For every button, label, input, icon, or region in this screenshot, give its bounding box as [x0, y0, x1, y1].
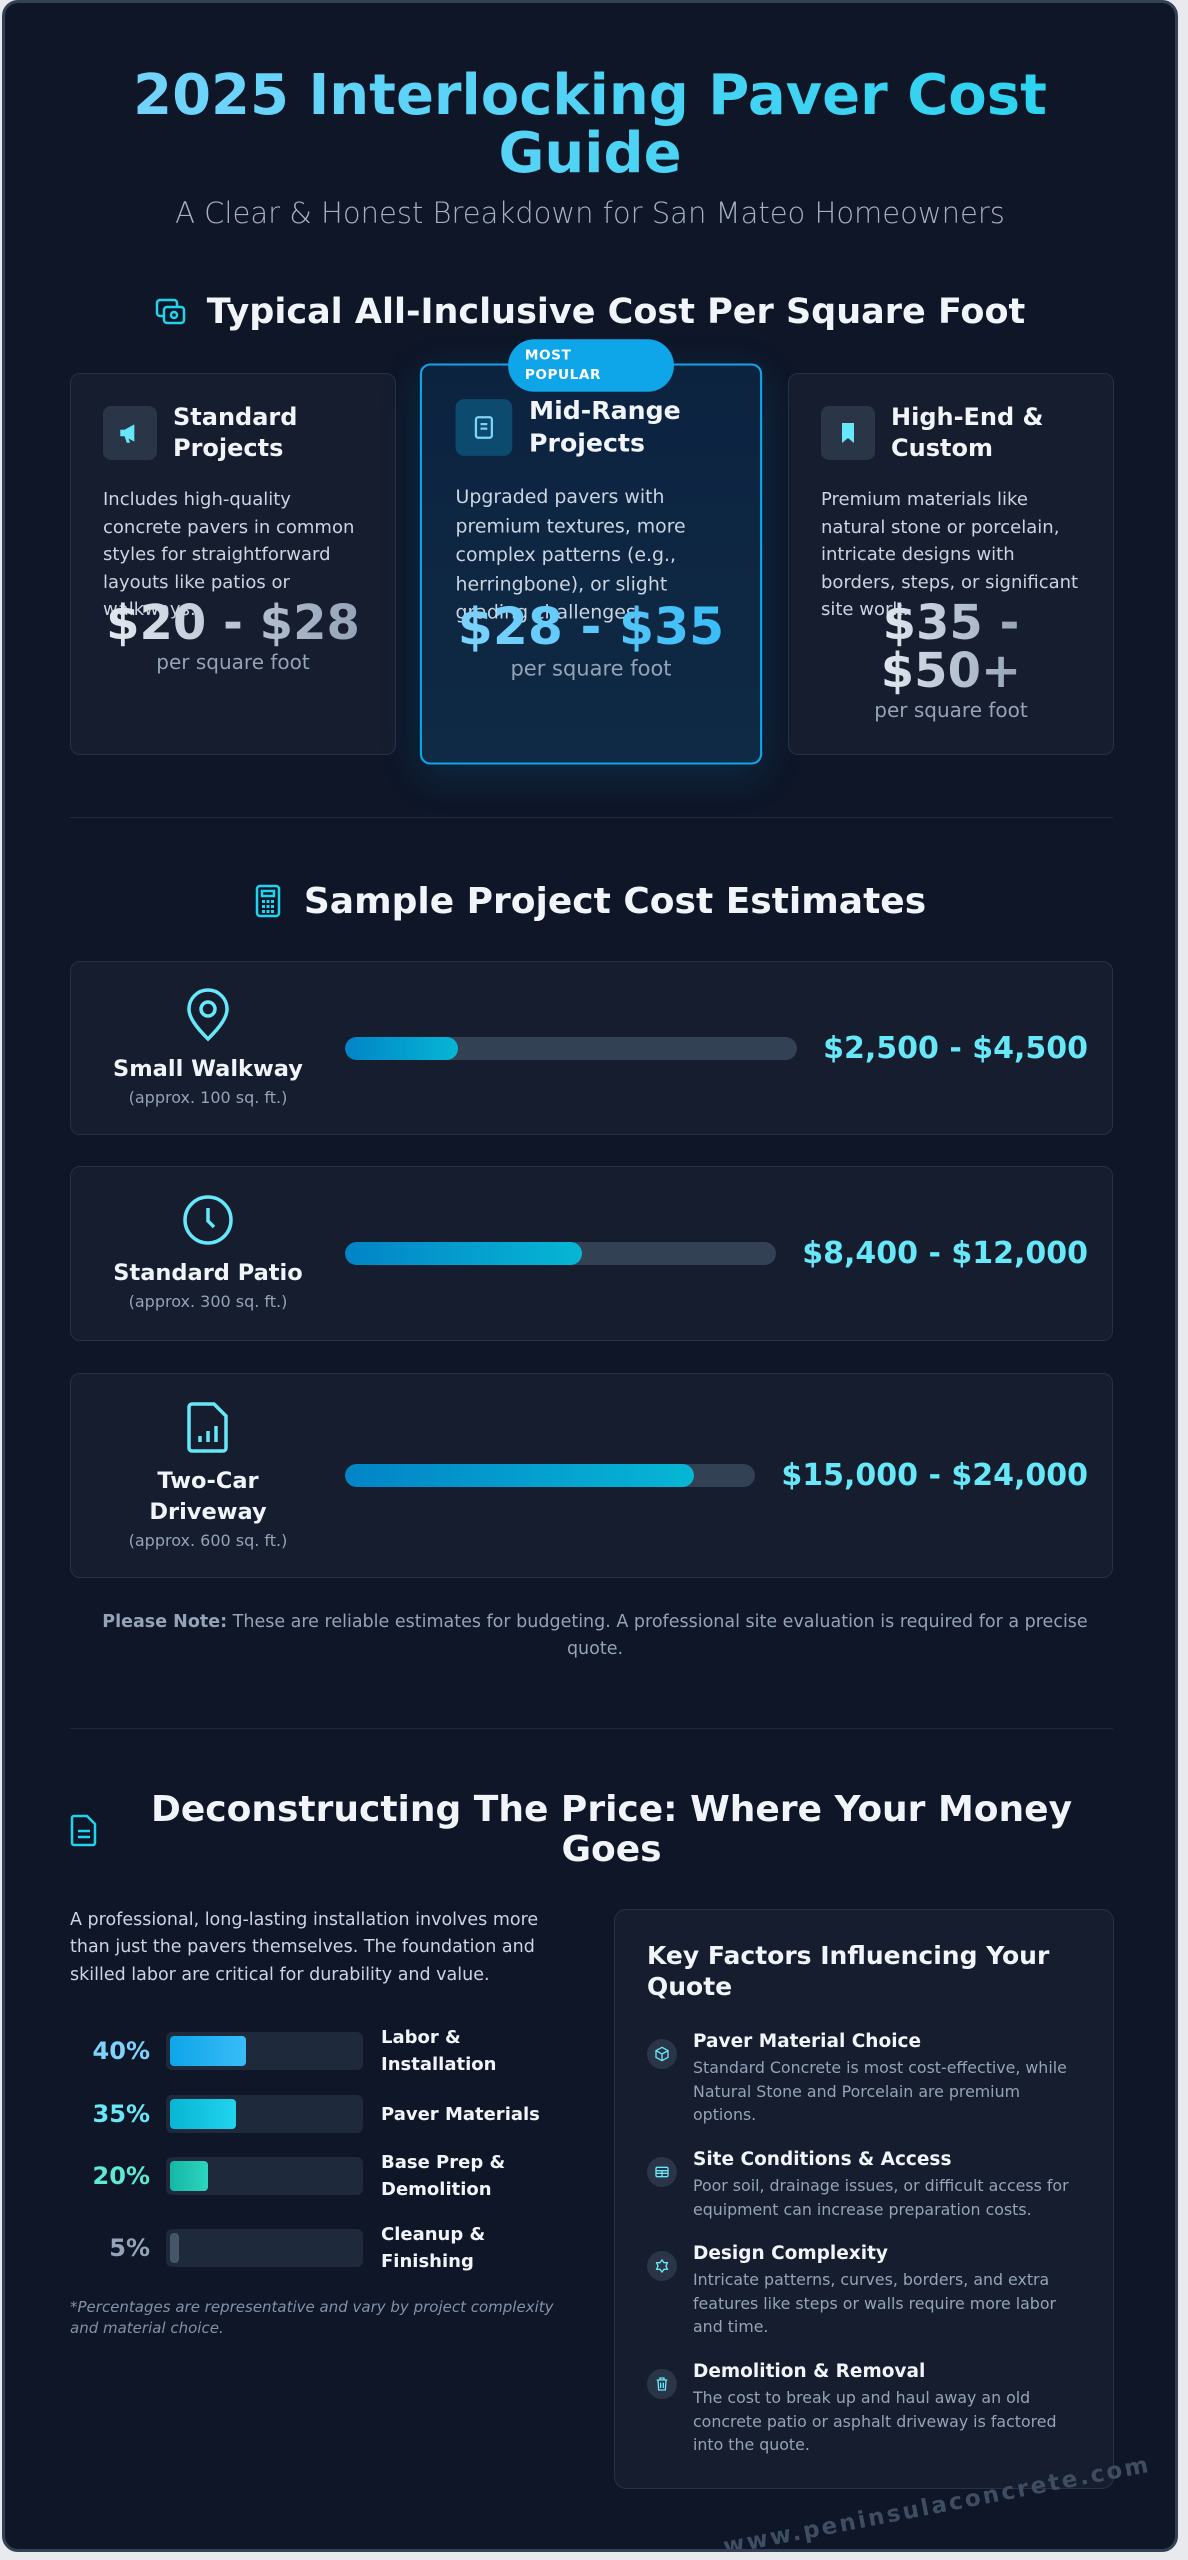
row: two-car driveway: $15,000 - $24,000 — [781, 1458, 1088, 1493]
card: high-end: Premium materials like natural stone or porcelain, intricate designs with borders, steps, or significant site work. — [821, 489, 1078, 620]
factor: demolition: Demolition & Removal — [693, 2361, 925, 2382]
price: $28 - $35 — [458, 598, 724, 656]
price: per square foot — [510, 655, 672, 681]
note: Please Note: These are reliable estimates for budgeting. A professional site evaluation is required for a precise quote. — [102, 1612, 1088, 1659]
text: 35% — [93, 2100, 150, 2128]
factor: material: Standard Concrete is most cost-effective, while Natural Stone and Porcelain are premium options. — [693, 2058, 1067, 2124]
factor: demolition — [647, 2361, 1057, 2454]
row: small walkway: (approx. 100 sq. ft.) — [129, 1088, 287, 1106]
icon: file chart — [187, 1402, 228, 1453]
price: $35 - — [883, 595, 1019, 651]
row: two-car driveway: Driveway — [149, 1498, 267, 1524]
card: standard projects: Standard Projects — [173, 403, 297, 462]
icon: bookmark — [821, 406, 875, 460]
row: two-car driveway: Two-Car — [157, 1468, 259, 1494]
card: standard projects — [70, 373, 396, 755]
footnote: *Percentages are representative and vary by project complexity and material choice. — [70, 2298, 554, 2337]
text: Base Prep & Demolition — [381, 2152, 505, 2200]
panel: key factors — [614, 1909, 1114, 2489]
price — [874, 595, 1028, 722]
factor: design: Design Complexity — [693, 2243, 888, 2264]
bar — [345, 1036, 797, 1060]
factor: site: Poor soil, drainage issues, or difficult access for equipment can increase preparation costs. — [693, 2176, 1069, 2218]
badge: most popular — [508, 339, 674, 392]
factor: material — [647, 2031, 1067, 2124]
card: standard projects: Includes high-quality concrete pavers in common styles for straightforward layouts like patios or walkways. — [103, 489, 354, 620]
factor: site — [647, 2149, 1069, 2218]
icon: document — [456, 399, 512, 456]
row: small walkway: $2,500 - $4,500 — [823, 1030, 1088, 1066]
subtitle: A Clear & Honest Breakdown for San Mateo Homeowners — [175, 196, 1005, 230]
card: high-end — [788, 373, 1114, 755]
row: standard patio: $8,400 - $12,000 — [802, 1236, 1088, 1271]
title: 2025 Interlocking Paver Cost — [133, 63, 1047, 128]
row: small walkway — [70, 961, 1113, 1135]
factor: design: Intricate patterns, curves, borders, and extra features like steps or walls require more labor and time. — [693, 2270, 1056, 2336]
row: standard patio: Standard Patio — [113, 1260, 303, 1286]
text: 5% — [109, 2234, 150, 2262]
price: per square foot — [874, 698, 1028, 722]
panel: key factors: Key Factors Influencing Your Quote — [647, 1941, 1049, 2001]
card: mid-range projects — [420, 363, 762, 765]
card: mid-range projects: Upgraded pavers with premium textures, more complex patterns (e.g., herringbone), or slight grading challenges. — [456, 486, 686, 624]
price: $20 - $28 — [106, 595, 360, 651]
row: standard patio: (approx. 300 sq. ft.) — [129, 1292, 287, 1311]
title — [5, 67, 1175, 183]
text: Paver Materials — [381, 2104, 540, 2124]
row: small walkway: Small Walkway — [113, 1056, 303, 1082]
factor: material: Paver Material Choice — [693, 2031, 921, 2052]
card: high-end: High-End & Custom — [891, 403, 1043, 462]
card: mid-range projects: Mid-Range Projects — [529, 396, 681, 458]
icon: megaphone — [103, 406, 157, 460]
badge: most popular: MOST — [525, 348, 571, 363]
row: two-car driveway — [70, 1373, 1113, 1578]
factor: design — [647, 2243, 1056, 2336]
badge: most popular: POPULAR — [525, 368, 601, 383]
factor: demolition: The cost to break up and haul away an old concrete patio or asphalt driveway is factored into the quote. — [693, 2388, 1057, 2454]
intro paragraph: A professional, long-lasting installation involves more than just the pavers themselves. The foundation and skilled labor are critical for durability and value. — [70, 1910, 538, 1985]
cost breakdown bars — [93, 2027, 540, 2272]
heading: deconstructing price: Deconstructing The Price: Where Your Money Goes — [151, 1789, 1072, 1870]
text: Cleanup & Finishing — [381, 2224, 485, 2272]
price: $50+ — [881, 643, 1021, 699]
row: standard patio — [70, 1166, 1113, 1341]
icon: clock — [183, 1195, 233, 1245]
heading: sample estimates: Sample Project Cost Estimates — [304, 880, 926, 922]
title: Guide — [498, 121, 682, 186]
price: per square foot — [156, 650, 310, 674]
icon: pin — [187, 988, 229, 1042]
text: 20% — [93, 2162, 150, 2190]
text: 40% — [93, 2037, 150, 2065]
row: two-car driveway: (approx. 600 sq. ft.) — [129, 1530, 287, 1550]
text: Labor & Installation — [381, 2027, 496, 2075]
bar — [345, 1464, 755, 1487]
factor: site: Site Conditions & Access — [693, 2149, 951, 2170]
heading: cost per square foot: Typical All-Inclusive Cost Per Square Foot — [207, 292, 1025, 332]
bar — [345, 1242, 776, 1265]
